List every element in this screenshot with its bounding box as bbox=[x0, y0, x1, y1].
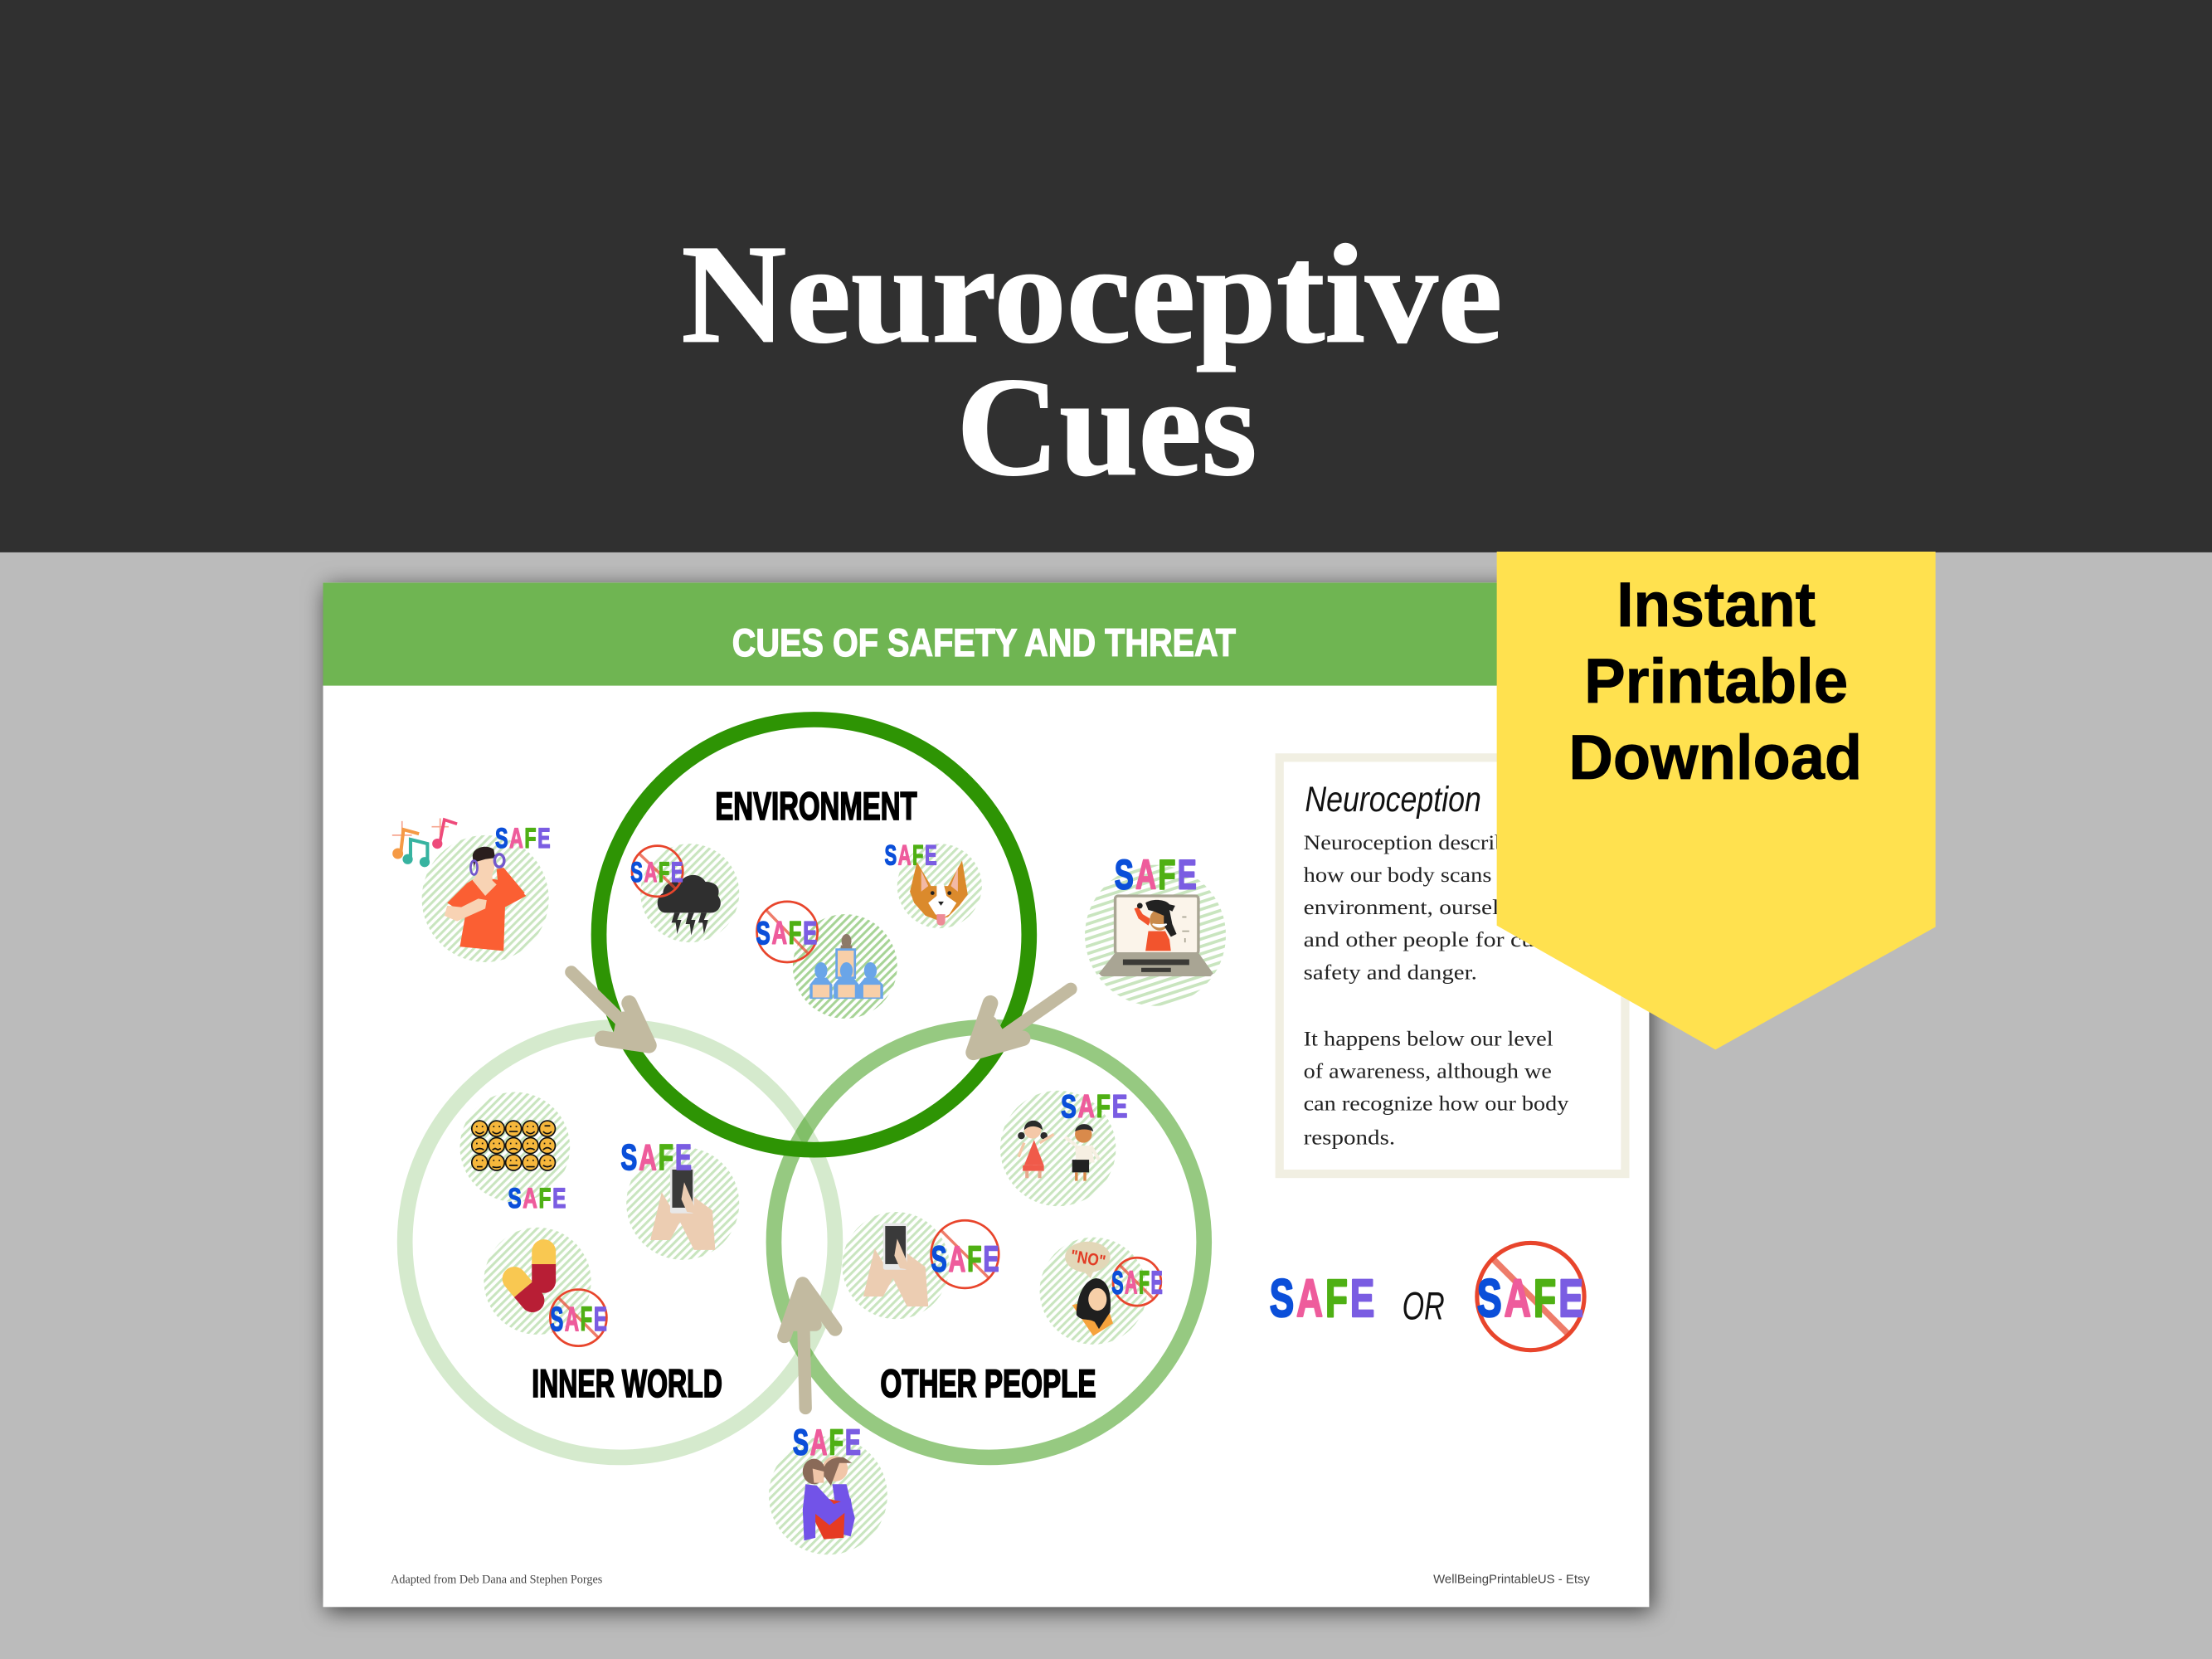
not safe tag: storm bbox=[630, 846, 684, 897]
icon: speaker and audience bbox=[793, 914, 897, 1019]
footer: credit: Adapted from Deb Dana and Stephen Porges bbox=[391, 1573, 603, 1586]
not safe tag: storm: SAFE bbox=[630, 857, 684, 888]
not safe tag: phone other bbox=[931, 1220, 1001, 1288]
icon: girl saying no: "NO" bbox=[1069, 1248, 1107, 1272]
arrow: upper left bbox=[571, 972, 649, 1045]
venn circle: inner world bbox=[405, 1027, 835, 1457]
label: inner world: INNER WORLD bbox=[532, 1362, 722, 1406]
not safe tag: speaker bbox=[756, 902, 819, 962]
icon: pills bbox=[484, 1228, 591, 1335]
legend: safe: SAFE bbox=[1270, 1268, 1377, 1328]
not safe tag: phone other: SAFE bbox=[931, 1238, 1001, 1279]
heading: neuroception: Neuroception bbox=[1305, 781, 1481, 820]
arrow: bottom bbox=[785, 1284, 835, 1408]
legend: not safe bbox=[1477, 1243, 1586, 1350]
not safe tag: girl: SAFE bbox=[1111, 1265, 1164, 1301]
legend: or: OR bbox=[1403, 1284, 1445, 1328]
arrow: upper right bbox=[974, 989, 1071, 1053]
paragraph 2: of awareness, although we bbox=[1304, 1060, 1552, 1082]
heading: cues of safety and threat: CUES OF SAFETY AND THREAT bbox=[732, 621, 1236, 665]
ribbon: instant printable download bbox=[1497, 552, 1936, 1049]
panel: worksheet card bbox=[323, 582, 1649, 1607]
icon: girl saying no bbox=[1040, 1238, 1147, 1345]
icon: hand holding phone (inner world) bbox=[626, 1147, 739, 1260]
venn circle: environment bbox=[599, 719, 1029, 1150]
not safe tag: speaker: SAFE bbox=[756, 914, 819, 951]
safe tag: kids: SAFE bbox=[1061, 1089, 1129, 1125]
safe tag: laptop: SAFE bbox=[1115, 852, 1198, 898]
icon: two children bbox=[1000, 1091, 1116, 1206]
safe tag: phone inner: SAFE bbox=[620, 1136, 693, 1177]
safe tag: music: SAFE bbox=[495, 823, 552, 854]
paragraph 1: how our body scans the bbox=[1304, 864, 1526, 887]
footer: shop name: WellBeingPrintableUS - Etsy bbox=[1433, 1573, 1591, 1586]
ribbon: instant printable download: Download bbox=[1568, 722, 1862, 793]
ribbon: instant printable download: Printable bbox=[1584, 646, 1848, 717]
paragraph 2: responds. bbox=[1304, 1126, 1395, 1149]
icon: person listening to music bbox=[392, 818, 549, 962]
paragraph 2 bbox=[1304, 1028, 1569, 1149]
paragraph 1: and other people for cues of bbox=[1304, 929, 1582, 951]
title: Cues bbox=[956, 348, 1257, 504]
icon: laptop video call bbox=[1085, 865, 1226, 1006]
venn circle: other people bbox=[774, 1027, 1204, 1457]
paragraph 1: Neuroception describes bbox=[1304, 832, 1526, 854]
icon: emoji grid bbox=[459, 1092, 570, 1202]
not safe tag: pills: SAFE bbox=[550, 1301, 608, 1339]
label: other people: OTHER PEOPLE bbox=[880, 1362, 1096, 1406]
not safe tag: pills bbox=[550, 1290, 608, 1346]
icon: hand holding phone (other people) bbox=[842, 1212, 950, 1319]
paragraph 2: It happens below our level bbox=[1304, 1028, 1553, 1050]
safe tag: dog: SAFE bbox=[884, 840, 938, 872]
icon: two people hugging bbox=[769, 1436, 887, 1554]
legend: not safe: SAFE bbox=[1477, 1268, 1586, 1328]
icon: dog bbox=[897, 844, 982, 928]
header band bbox=[323, 582, 1649, 686]
safe tag: hug: SAFE bbox=[793, 1423, 863, 1462]
paragraph 2: can recognize how our body bbox=[1304, 1093, 1569, 1116]
ribbon: instant printable download: Instant bbox=[1616, 570, 1816, 640]
paragraph 1: environment, ourselves, bbox=[1304, 897, 1538, 919]
paragraph 1: safety and danger. bbox=[1304, 961, 1477, 984]
safe tag: emoji: SAFE bbox=[508, 1183, 567, 1214]
label: environment: ENVIRONMENT bbox=[715, 785, 917, 829]
top dark band bbox=[0, 0, 2212, 552]
text panel: neuroception bbox=[1280, 757, 1625, 1174]
title: Neuroceptive bbox=[682, 216, 1502, 372]
icon: storm cloud bbox=[640, 844, 739, 942]
title bbox=[682, 216, 1502, 504]
paragraph 1 bbox=[1304, 832, 1582, 984]
